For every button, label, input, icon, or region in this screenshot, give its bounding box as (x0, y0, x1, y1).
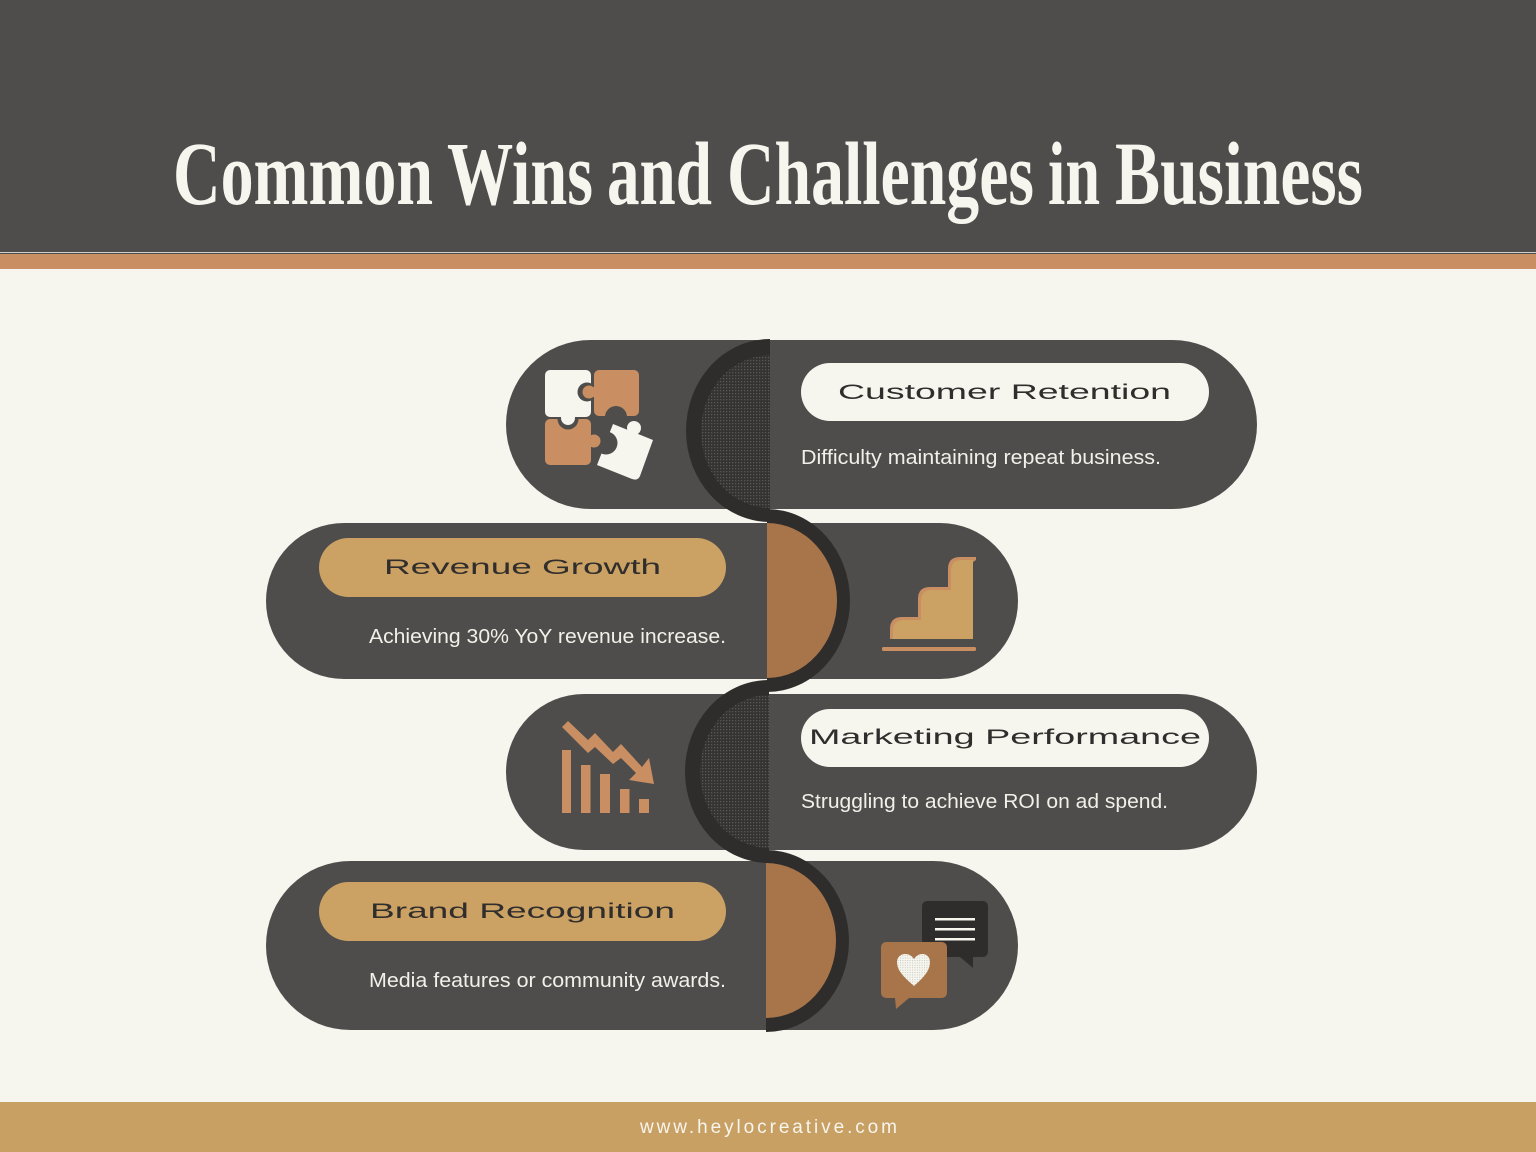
description: brand recognition: Media features or community awards. (369, 970, 726, 992)
panel: brand recognition (266, 861, 1018, 1030)
header band (0, 0, 1536, 269)
icon: puzzle (545, 370, 653, 480)
title: Common (173, 125, 433, 224)
footer url: www.heylocreative.com (639, 1117, 897, 1138)
label: marketing performance: Marketing Performance (809, 726, 1201, 749)
description: customer retention: Difficulty maintaining repeat business. (801, 447, 1161, 469)
label: brand recognition: Brand Recognition (370, 900, 675, 923)
title: Business (1115, 125, 1363, 224)
pill: marketing performance (801, 709, 1209, 767)
icon: declining bar chart (562, 721, 654, 813)
panel: marketing performance (506, 694, 1257, 850)
panel: revenue growth (266, 523, 1018, 679)
title (173, 125, 1363, 224)
description: revenue growth: Achieving 30% YoY revenue increase. (369, 626, 726, 648)
footer band (0, 1102, 1536, 1152)
pill: brand recognition (319, 882, 726, 941)
title: Challenges (727, 125, 1034, 224)
s-curve connector (685, 339, 850, 1032)
pill: customer retention (801, 363, 1209, 421)
icon: stairs (882, 557, 976, 651)
description: marketing performance: Struggling to achieve ROI on ad spend. (801, 791, 1168, 813)
panel: customer retention (506, 340, 1257, 509)
title: and (607, 125, 712, 224)
icon: chat bubbles (881, 901, 988, 1009)
title: in (1048, 125, 1100, 224)
label: customer retention: Customer Retention (838, 381, 1171, 404)
title: Wins (447, 125, 593, 224)
label: revenue growth: Revenue Growth (384, 556, 661, 579)
pill: revenue growth (319, 538, 726, 597)
